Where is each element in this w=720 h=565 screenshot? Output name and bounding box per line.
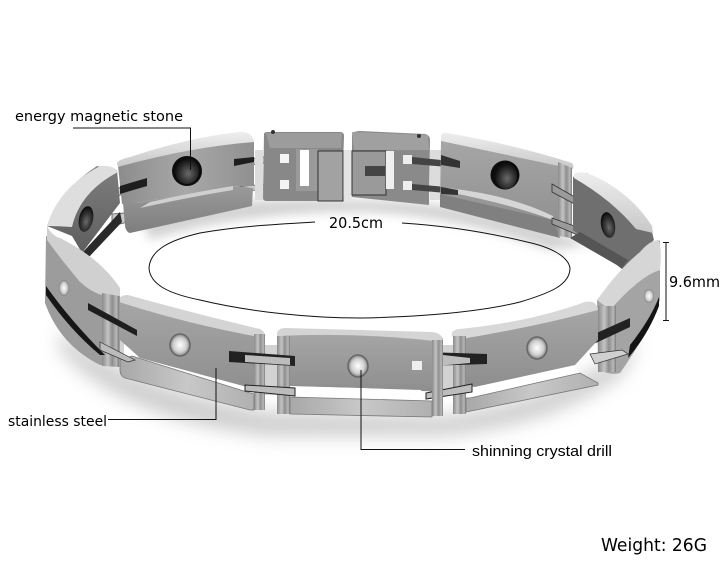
callout: energy magnetic stone — [15, 109, 190, 170]
link: upper right with magnet — [440, 133, 580, 238]
link: front centre with crystal — [277, 328, 443, 417]
front connector backing — [118, 320, 453, 395]
measure: circumference ellipse line — [149, 222, 570, 318]
label: 20.5cm: 20.5cm — [329, 214, 383, 232]
callout: shinning crystal drill: shinning crystal drill — [472, 443, 612, 460]
link: far left with magnet — [47, 166, 122, 258]
link: front left with crystal — [119, 295, 295, 410]
link: upper left with magnetic stone — [117, 132, 254, 233]
callout: stainless steel — [8, 368, 216, 430]
link: front right with crystal — [425, 302, 598, 414]
bracelet — [45, 130, 661, 417]
link: right front with crystal — [581, 240, 661, 374]
measure: width bracket — [663, 242, 669, 320]
callout: stainless steel: stainless steel — [8, 414, 107, 430]
link: far left front with crystal — [45, 226, 137, 367]
link: far right with magnet — [570, 172, 654, 270]
callout: shinning crystal drill — [361, 370, 612, 460]
reflection shadow — [60, 199, 640, 436]
callout: energy magnetic stone: energy magnetic stone — [15, 109, 183, 125]
clasp — [263, 130, 460, 205]
weight label: Weight: 26G — [601, 535, 707, 556]
back connector pins — [112, 150, 441, 226]
